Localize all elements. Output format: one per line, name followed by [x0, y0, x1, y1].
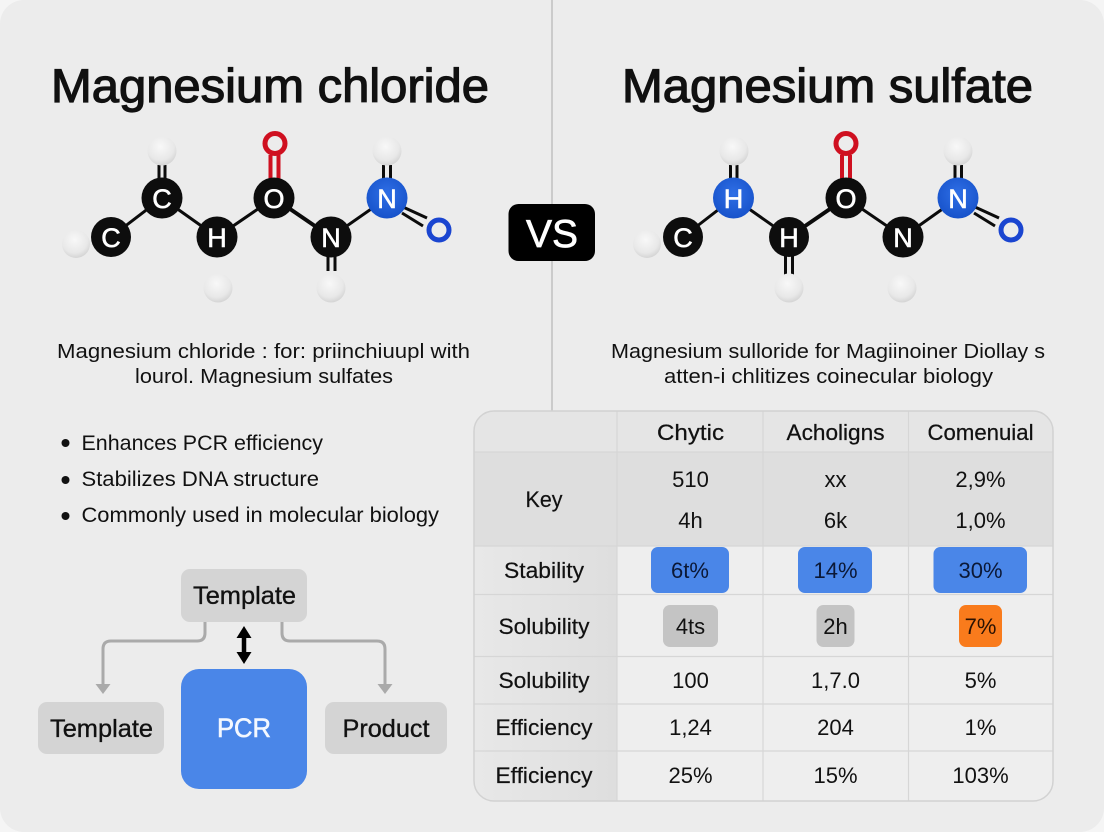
table values: 4ts — [676, 614, 705, 639]
bullet list: Enhances PCR efficiency — [82, 432, 323, 455]
arrow: template to left template — [96, 622, 205, 694]
molecule diagram: magnesium chloride: O — [263, 184, 285, 214]
description: magnesium chloride — [57, 340, 470, 388]
molecule diagram: magnesium sulfate: H — [724, 184, 743, 214]
table values: 7% — [965, 614, 996, 639]
box: PCR: PCR — [217, 713, 271, 743]
table values: 1,7.0 — [811, 668, 860, 693]
molecule diagram: magnesium chloride: N — [321, 223, 341, 253]
table values: 2h — [823, 614, 848, 639]
table header row — [657, 420, 1034, 445]
molecule diagram: magnesium chloride: N — [377, 184, 397, 214]
box: PCR — [181, 669, 307, 789]
VS badge — [508, 204, 595, 261]
table values: 6t% — [671, 558, 709, 583]
VS badge: VS — [526, 213, 578, 256]
box: top template: Template — [193, 582, 296, 610]
bullet list — [62, 432, 440, 527]
table values: 2,9% — [955, 467, 1006, 492]
molecule diagram: magnesium sulfate: N — [948, 184, 968, 214]
box: left template: Template — [50, 715, 153, 743]
arrow: template to product — [282, 622, 392, 694]
molecule diagram: magnesium sulfate: N — [893, 223, 913, 253]
table values: 1% — [965, 715, 996, 740]
molecule diagram: magnesium sulfate — [633, 134, 1021, 302]
molecule diagram: magnesium chloride: C — [101, 223, 121, 253]
box: left template — [38, 702, 164, 754]
description: magnesium sulfate: atten-i chlitizes coinecular biology — [664, 365, 994, 388]
box: top template — [181, 569, 307, 622]
table pills: solubility — [663, 605, 1002, 647]
table row labels: Efficiency — [496, 715, 592, 740]
table values: 510 — [672, 467, 709, 492]
table header row: Acholigns — [786, 420, 884, 445]
molecule diagram: magnesium sulfate: C — [673, 223, 693, 253]
molecule diagram: magnesium chloride: H — [207, 223, 227, 253]
table values: 204 — [817, 715, 854, 740]
table values: 1,0% — [955, 508, 1006, 533]
bullet list: Commonly used in molecular biology — [82, 504, 440, 527]
table values: 30% — [958, 558, 1003, 583]
description: magnesium sulfate: Magnesium sulloride for Magiinoiner Diollay s — [611, 340, 1045, 363]
description: magnesium chloride: Magnesium chloride : for: priinchiuupl with — [57, 340, 470, 363]
description: magnesium chloride: lourol. Magnesium sulfates — [135, 365, 393, 388]
table row labels: Efficiency — [496, 763, 592, 788]
table values: 103% — [952, 763, 1009, 788]
table values: xx — [824, 467, 846, 492]
box: product: Product — [342, 715, 430, 743]
table values: 100 — [672, 668, 709, 693]
title: Magnesium sulfate: Magnesium sulfate — [622, 59, 1033, 112]
table pills: stability — [651, 547, 1027, 593]
table values: 6k — [824, 508, 848, 533]
molecule diagram: magnesium sulfate: H — [779, 223, 799, 253]
title: Magnesium chloride: Magnesium chloride — [51, 59, 489, 112]
table values — [668, 467, 1009, 788]
table values: 1,24 — [669, 715, 712, 740]
table values: 15% — [813, 763, 858, 788]
table row labels: Key — [526, 487, 562, 512]
table values: 5% — [965, 668, 996, 693]
PCR flow diagram — [38, 569, 447, 789]
table row labels — [496, 487, 592, 788]
comparison table — [474, 411, 1053, 801]
description: magnesium sulfate — [611, 340, 1045, 388]
table header row: Chytic — [657, 420, 724, 445]
table row labels: Stability — [504, 558, 584, 583]
box: product — [325, 702, 447, 754]
table values: 25% — [668, 763, 713, 788]
table values: 14% — [813, 558, 858, 583]
table header row: Comenuial — [928, 420, 1034, 445]
molecule diagram: magnesium chloride: C — [152, 184, 172, 214]
arrow: template and PCR double arrow — [236, 626, 252, 664]
bullet list: Stabilizes DNA structure — [82, 468, 319, 491]
molecule diagram: magnesium sulfate: O — [835, 184, 857, 214]
table values: 4h — [678, 508, 703, 533]
table row labels: Solubility — [498, 668, 590, 693]
molecule diagram: magnesium chloride — [62, 134, 449, 302]
table row labels: Solubility — [498, 614, 590, 639]
